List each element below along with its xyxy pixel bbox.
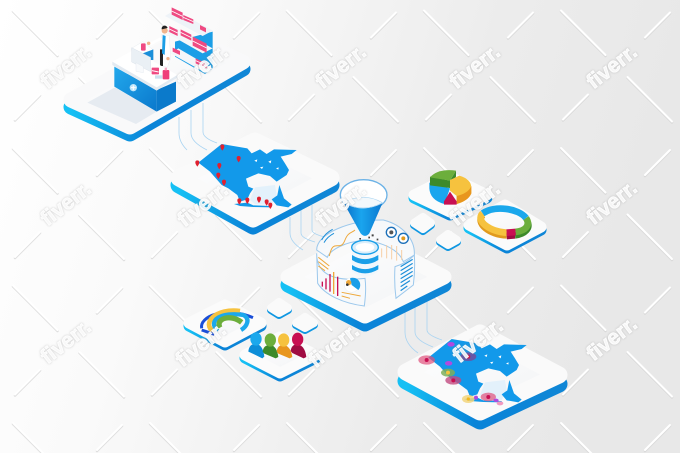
map: [195, 144, 297, 209]
watermarks: fiverr.: [36, 40, 96, 94]
panel: pharmacy platform: [71, 7, 243, 134]
funnel scene: [317, 180, 415, 306]
icon: shelves: [165, 7, 213, 74]
panel: rainbow chart platform: [189, 305, 261, 345]
left front panel: [317, 253, 366, 306]
right front panel: [395, 255, 415, 298]
watermarks: fiverr.: [304, 319, 364, 373]
connector lines: [179, 103, 442, 353]
counter: [112, 50, 177, 112]
chart: 3D donut: [481, 209, 528, 236]
small counter: [132, 42, 153, 59]
pharmacy scene: [87, 7, 213, 124]
funnel: [340, 180, 387, 236]
panel: small tiles left: [271, 302, 314, 330]
gauges: [386, 227, 408, 243]
chart: radial arcs: [201, 311, 253, 334]
monitor: [132, 48, 151, 73]
watermarks: fiverr.: [311, 178, 371, 232]
panel: pie chart platform: [414, 170, 487, 215]
icon: people group: [248, 332, 306, 358]
back ring wall: [317, 220, 414, 262]
panel: map with heat circles: [406, 333, 559, 421]
watermarks: fiverr.: [173, 40, 233, 94]
watermarks: fiverr.: [445, 40, 505, 94]
watermarks: fiverr.: [582, 176, 642, 230]
chart: 3D pie: [429, 170, 471, 205]
watermarks: fiverr.: [445, 177, 505, 231]
panel: small tiles right: [414, 217, 457, 247]
watermarks: fiverr.: [173, 178, 233, 232]
watermarks: fiverr.: [448, 314, 508, 368]
watermarks: fiverr.: [36, 315, 96, 369]
panel: people platform: [245, 332, 316, 376]
watermarks: fiverr.: [36, 177, 96, 231]
watermarks: fiverr.: [582, 312, 642, 366]
panel: donut chart platform: [469, 205, 541, 248]
map pins: [195, 144, 272, 209]
database cylinder: [352, 240, 378, 277]
panel: map with pins: [179, 141, 331, 226]
watermarks: fiverr.: [582, 40, 642, 94]
panel: data funnel platform: [288, 180, 444, 324]
doctor: [147, 26, 171, 67]
map: [418, 339, 527, 405]
watermarks: fiverr.: [171, 318, 231, 372]
watermarks: fiverr.: [311, 40, 371, 94]
heat circles: [418, 342, 503, 405]
watermarks: [36, 40, 642, 373]
